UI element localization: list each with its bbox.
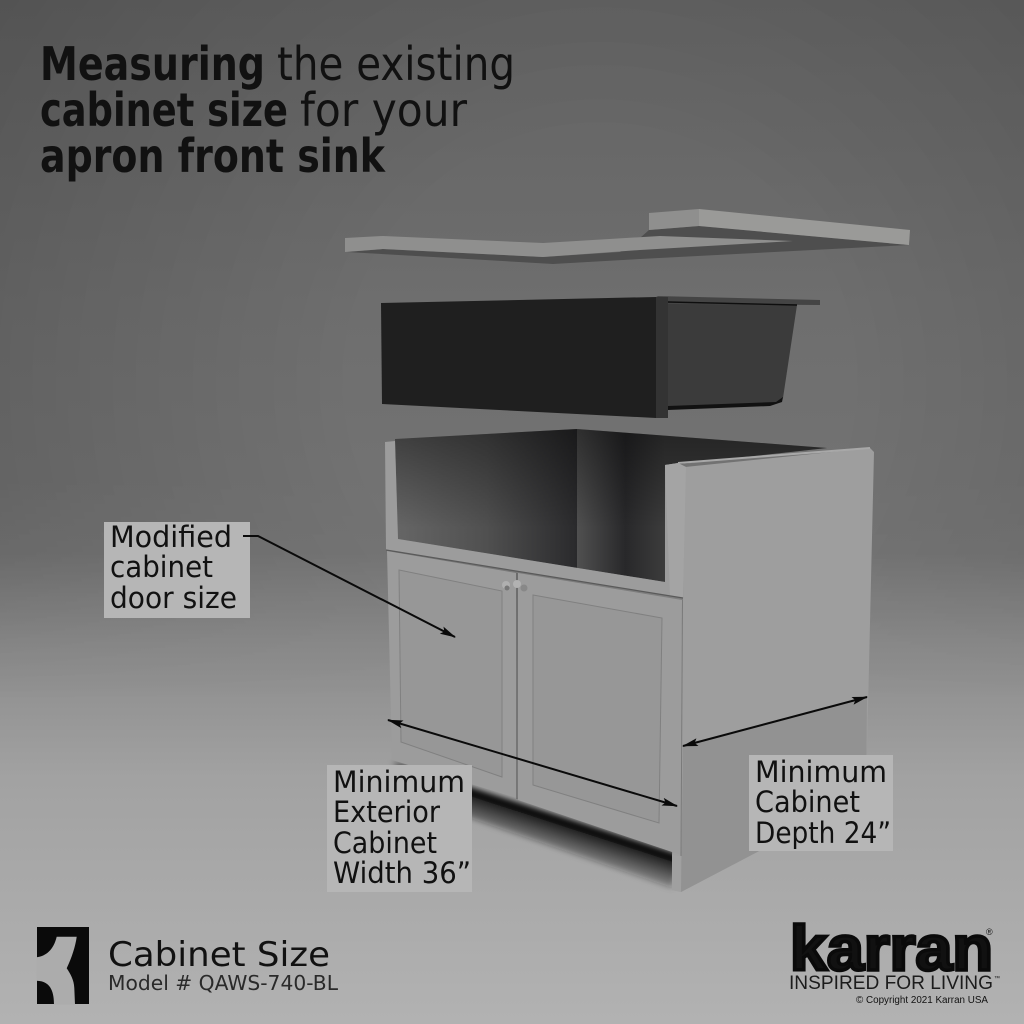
arrow: width [388, 720, 677, 806]
floor shadow [392, 762, 681, 888]
title: Measuring [40, 37, 265, 91]
title: apron front sink [40, 129, 386, 183]
sink rim [656, 296, 820, 305]
sink apron front [381, 297, 656, 418]
karran logo: ™ [994, 975, 1000, 982]
icon: brand mark [36, 927, 89, 1004]
label: cabinet depth: Cabinet [755, 785, 860, 819]
footer heading [108, 935, 339, 995]
arrow: door [243, 536, 455, 637]
karran logo: INSPIRED FOR LIVING [789, 972, 993, 994]
label: cabinet door: cabinet [110, 550, 213, 584]
title: cabinet size [40, 83, 288, 137]
cabinet side panel [672, 448, 874, 892]
knobs [502, 580, 528, 592]
arrow: depth [683, 697, 867, 746]
karran logo: karran [790, 914, 993, 984]
left door [387, 551, 517, 798]
label: cabinet width: Exterior [333, 795, 440, 829]
footer heading: Model # QAWS-740-BL [108, 971, 339, 995]
countertop back plank right face [699, 209, 910, 245]
label: cabinet door [104, 520, 250, 618]
countertop [345, 209, 910, 264]
cabinet interior [395, 429, 827, 582]
toe kick [672, 855, 681, 892]
countertop underside [347, 226, 909, 264]
sink [381, 296, 820, 418]
karran logo [789, 914, 1000, 1006]
sink end edge [656, 297, 668, 418]
right door [518, 573, 682, 855]
title: for your [300, 83, 467, 137]
cabinet face frame [385, 441, 686, 598]
karran logo: ® [986, 927, 993, 937]
label: cabinet width: Minimum [333, 765, 465, 799]
label: cabinet width: Width 36” [333, 856, 471, 890]
title: the existing [277, 37, 515, 91]
label: cabinet depth [749, 755, 893, 851]
label: cabinet depth: Depth 24” [755, 816, 891, 850]
label: cabinet width: Cabinet [333, 826, 437, 860]
label: cabinet width [327, 765, 472, 892]
countertop left plank [345, 236, 793, 257]
label: cabinet door: door size [110, 581, 237, 615]
label: cabinet door: Modified [110, 520, 232, 554]
sink basin side [668, 302, 797, 408]
countertop back plank left face [649, 209, 699, 230]
karran logo: © Copyright 2021 Karran USA [856, 995, 988, 1006]
cabinet [385, 429, 874, 892]
footer heading: Cabinet Size [108, 935, 330, 975]
title [40, 37, 515, 183]
label: cabinet depth: Minimum [755, 755, 887, 789]
